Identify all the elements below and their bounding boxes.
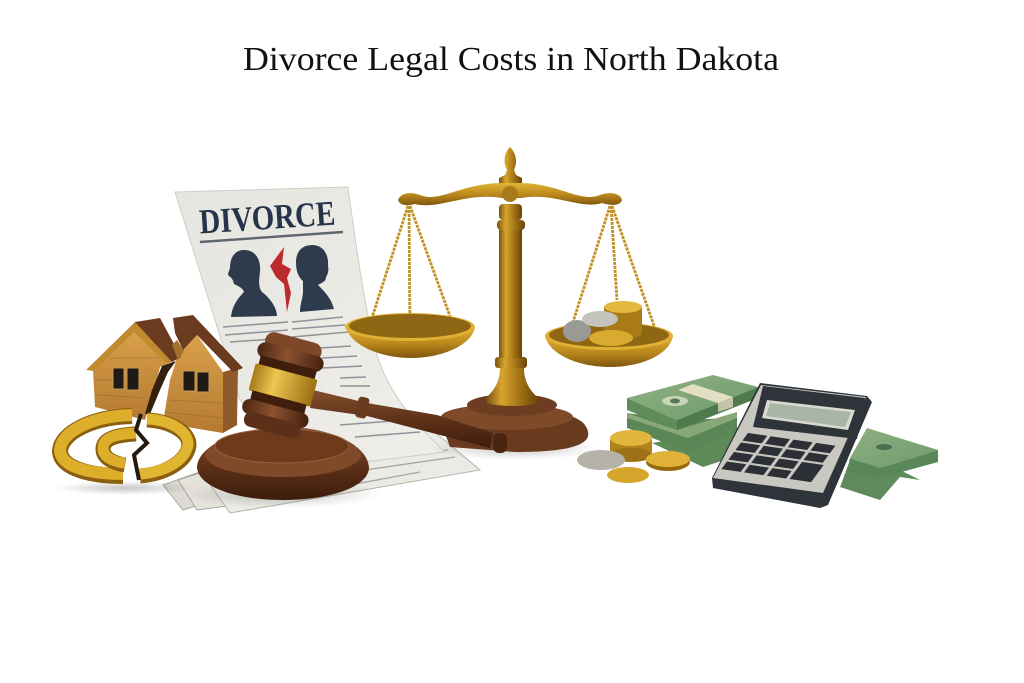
icon: red lightning crack [270, 247, 291, 312]
calculator screen [762, 400, 855, 430]
illustration: calculator [712, 383, 872, 508]
document heading: DIVORCE [198, 194, 336, 241]
illustration: loose coins [577, 430, 690, 483]
left scale pan [346, 327, 475, 358]
illustration: gavel [237, 329, 507, 453]
illustration: cracked wooden house [86, 315, 243, 433]
icon: house roof [135, 318, 181, 362]
icon: house windows [113, 368, 209, 392]
title: Divorce Legal Costs in North Dakota [243, 41, 779, 78]
illustration: cash stacks [627, 375, 938, 500]
illustration: broken wedding rings [55, 414, 195, 495]
icon: house crack [145, 361, 176, 414]
illustration: scales of justice [345, 147, 673, 460]
left scale chains [368, 206, 455, 333]
right scale pan [545, 336, 673, 367]
illustration: lower paper stack [163, 412, 480, 513]
right scale chains [573, 206, 658, 337]
scale finial [499, 147, 522, 184]
icon: right silhouette [296, 245, 334, 312]
coins in pan [563, 301, 642, 346]
icon: left silhouette [228, 250, 277, 317]
illustration: gavel sound block [183, 427, 383, 508]
scale base [430, 436, 600, 460]
calculator keys [721, 433, 838, 482]
scale column [486, 368, 538, 406]
illustration: divorce document [175, 187, 445, 470]
scale beam [398, 183, 622, 205]
